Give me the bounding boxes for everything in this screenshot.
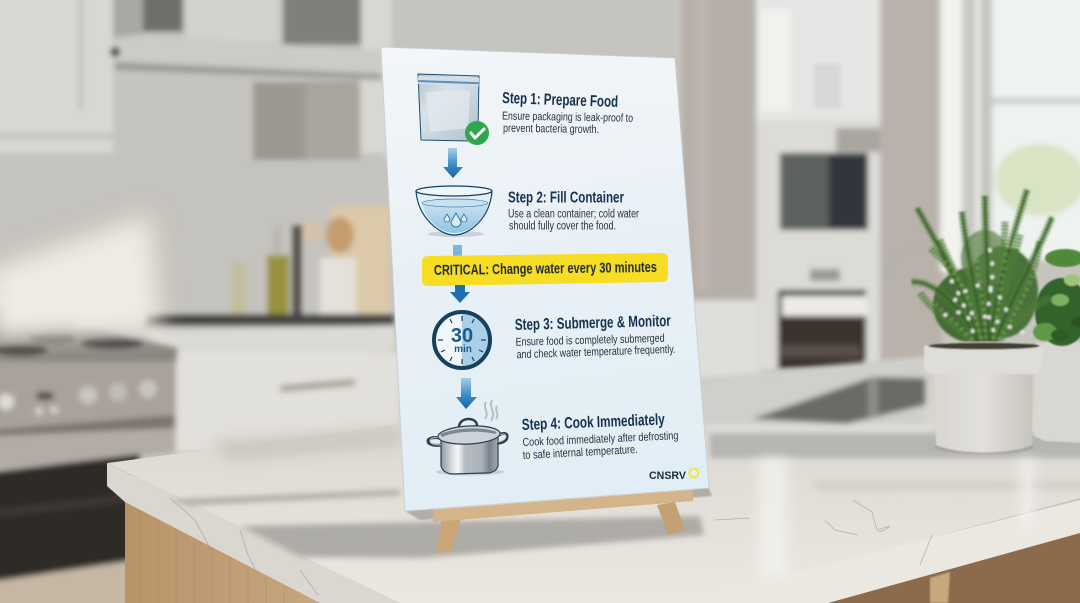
wood grain: [140, 510, 284, 603]
oven right: [810, 269, 840, 281]
arrow 1: [443, 148, 463, 178]
step 4 text: Step 4: Cook Immediately: [522, 412, 665, 434]
steam: [485, 400, 497, 421]
step 1 text: Ensure packaging is leak-proof to: [502, 111, 633, 125]
step 1 text: prevent bacteria growth.: [503, 123, 599, 136]
sign shadow on counter: [405, 488, 712, 520]
icon: water bowl: [416, 186, 492, 237]
sign board: [381, 47, 709, 511]
step 2 text: should fully cover the food.: [509, 221, 616, 233]
soft counter highlights: [210, 426, 1034, 578]
logo: CNSRV: [649, 468, 698, 482]
tall unit: [756, 0, 880, 122]
dark hood surround: [113, 0, 143, 50]
white blossom specks: [944, 250, 1030, 340]
icon: steaming pot: [428, 400, 507, 476]
counter front edge right: [690, 500, 1080, 603]
step 4 text: [522, 412, 679, 462]
wood cabinet left: [125, 500, 320, 603]
arrow 3: [456, 378, 477, 409]
icon: 30 minute timer: 30: [451, 325, 473, 347]
herb plants: [912, 190, 1080, 454]
step 3 text: Ensure food is completely submerged: [515, 333, 665, 349]
right wall: [682, 0, 756, 310]
step 1 text: Step 1: Prepare Food: [502, 90, 618, 111]
back counter and reflections: [170, 356, 1080, 558]
backsplash light patch: [0, 215, 160, 340]
easel: [433, 488, 693, 553]
cutting board and utensils: [330, 206, 390, 324]
step 4 text: Cook food immediately after defrosting: [522, 430, 679, 449]
logo: CNSRV: CNSRV: [649, 470, 687, 482]
faucet: [887, 249, 925, 282]
stove: [0, 308, 75, 340]
icon: 30 minute timer: min: [454, 344, 472, 355]
microwave: [780, 153, 868, 230]
rosemary pot: [924, 342, 1043, 454]
wood cabinet right: [828, 533, 1080, 603]
basil plant: [1033, 249, 1080, 346]
board surface: [381, 47, 709, 511]
countertop: [107, 352, 1080, 603]
counter front edge left: [107, 463, 400, 603]
icon: 30 minute timer: [434, 312, 490, 368]
step 3 text: [515, 313, 676, 361]
backsplash: [0, 153, 385, 328]
window wall: [880, 0, 942, 370]
counter top surface: [107, 352, 1080, 603]
step 4 text: to safe internal temperature.: [523, 444, 638, 462]
step 2 text: Step 2: Fill Container: [508, 189, 624, 206]
needle foliage: [912, 190, 1052, 345]
icon: plastic bag with check: [418, 74, 489, 145]
stems: [912, 190, 1052, 345]
oven door: [0, 454, 140, 585]
light leaves: [930, 235, 1035, 345]
right pot: [1034, 342, 1080, 443]
window: [992, 0, 1080, 260]
step 2 text: Use a clean container; cold water: [508, 209, 639, 221]
range hood strip: [113, 34, 382, 77]
worktop and drawers: [145, 314, 395, 326]
step 3 text: and check water temperature frequently.: [516, 344, 676, 361]
callout: critical: CRITICAL: Change water every 30 minutes: [434, 259, 657, 279]
callout: critical: [422, 253, 668, 286]
step 3 text: Step 3: Submerge & Monitor: [515, 313, 671, 334]
right leg: [657, 502, 685, 535]
arrow 2 top stub: [453, 245, 462, 257]
arrow 2: [450, 285, 470, 303]
niche: [253, 82, 358, 160]
step 1 text: [502, 90, 633, 136]
step 2 text: [508, 189, 639, 233]
easel ledge: [433, 488, 693, 522]
marble veins: [170, 498, 932, 595]
upper cabinet left: [0, 0, 113, 153]
left leg: [436, 518, 461, 553]
green check badge: [465, 121, 489, 145]
rosemary plant: [912, 190, 1052, 345]
